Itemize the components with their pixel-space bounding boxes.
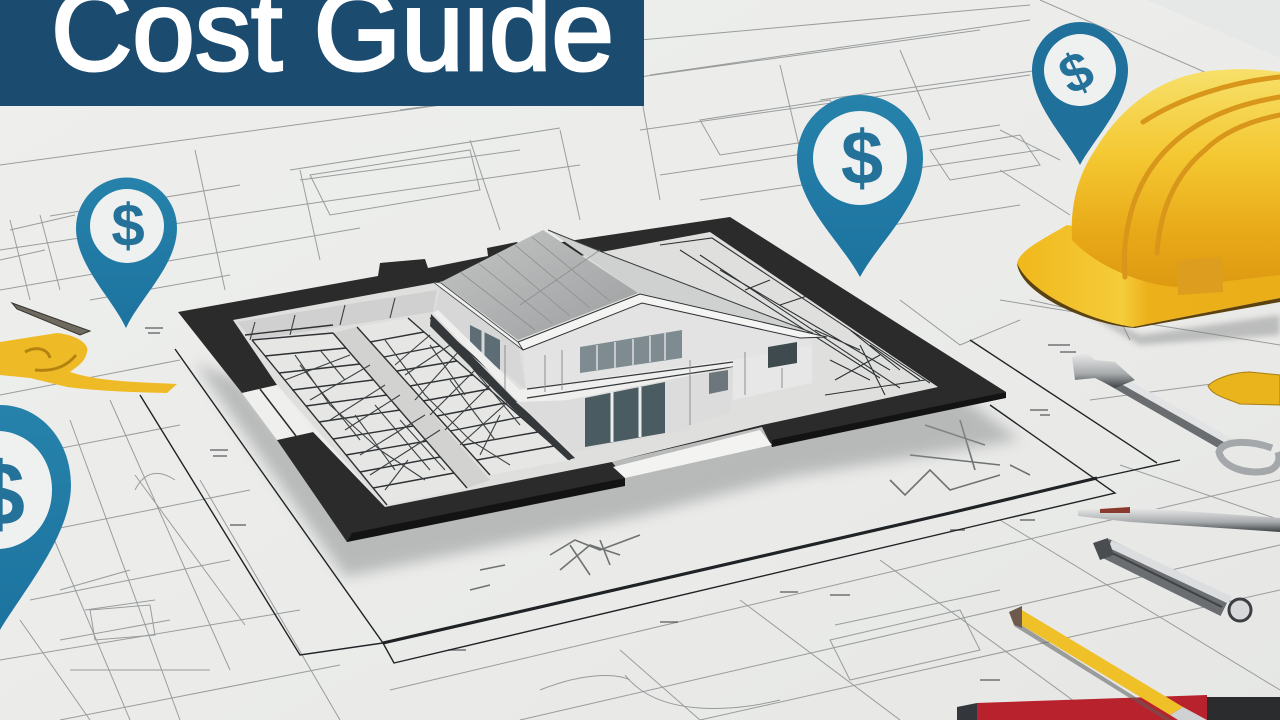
house gable wall	[523, 305, 812, 400]
house left windows	[470, 325, 500, 370]
house left side wall	[434, 283, 526, 390]
icon: red pencil	[957, 695, 1280, 720]
icon: left yellow curve ruler	[0, 333, 177, 393]
white cut-out	[242, 385, 313, 440]
house ledge	[433, 310, 733, 408]
pin: left: $	[111, 192, 145, 259]
white strip	[613, 430, 772, 478]
hat shadow	[1030, 280, 1280, 345]
platform interior	[233, 232, 938, 507]
icon: left pen	[12, 303, 90, 335]
hat brim	[1017, 225, 1280, 327]
floor plan platform	[178, 217, 1006, 542]
floor plan shadow	[195, 363, 1020, 577]
pin: top right	[1032, 22, 1128, 165]
house door window	[709, 370, 728, 394]
house rear roof	[548, 230, 813, 333]
pin: top centre: $	[841, 116, 883, 201]
pin: top right: $	[1050, 39, 1103, 106]
icon: steel pen	[1078, 507, 1280, 532]
floor plan scribbles	[250, 298, 520, 490]
hat tab	[1177, 257, 1223, 295]
house model	[430, 230, 827, 460]
icon: socket tool	[1093, 538, 1251, 621]
house main roof	[441, 230, 638, 340]
floor plan right panel	[357, 318, 570, 475]
site boundary lines	[140, 340, 1180, 663]
house lower wall	[516, 367, 733, 452]
pin: top centre	[797, 95, 923, 277]
floor plan right quadrant	[660, 238, 930, 395]
icon: yellow pencil	[1009, 606, 1207, 720]
house right window	[768, 342, 797, 368]
hat ridges	[1124, 77, 1280, 277]
house under-ledge dark band	[430, 314, 575, 460]
pin: lower left	[0, 405, 71, 630]
house right wall	[733, 345, 812, 400]
pin: left	[76, 178, 177, 328]
house glass doors	[585, 382, 665, 447]
hat dome	[1072, 69, 1280, 287]
icon: yellow tape measure	[1208, 372, 1280, 405]
platform bottom bevel	[347, 392, 1006, 542]
platform dark frame	[178, 217, 1006, 542]
floor plan grey top strip	[237, 290, 437, 340]
icon: hard hat	[1017, 69, 1280, 345]
floor plan central aisle	[333, 327, 490, 488]
icon: wrench	[1072, 352, 1279, 472]
house upper window	[580, 330, 682, 373]
floor plan left panel	[252, 333, 467, 505]
title banner	[0, 0, 644, 106]
house fascia	[518, 294, 827, 350]
floor plan hatching	[245, 318, 580, 505]
blueprint annotations	[145, 328, 1076, 680]
